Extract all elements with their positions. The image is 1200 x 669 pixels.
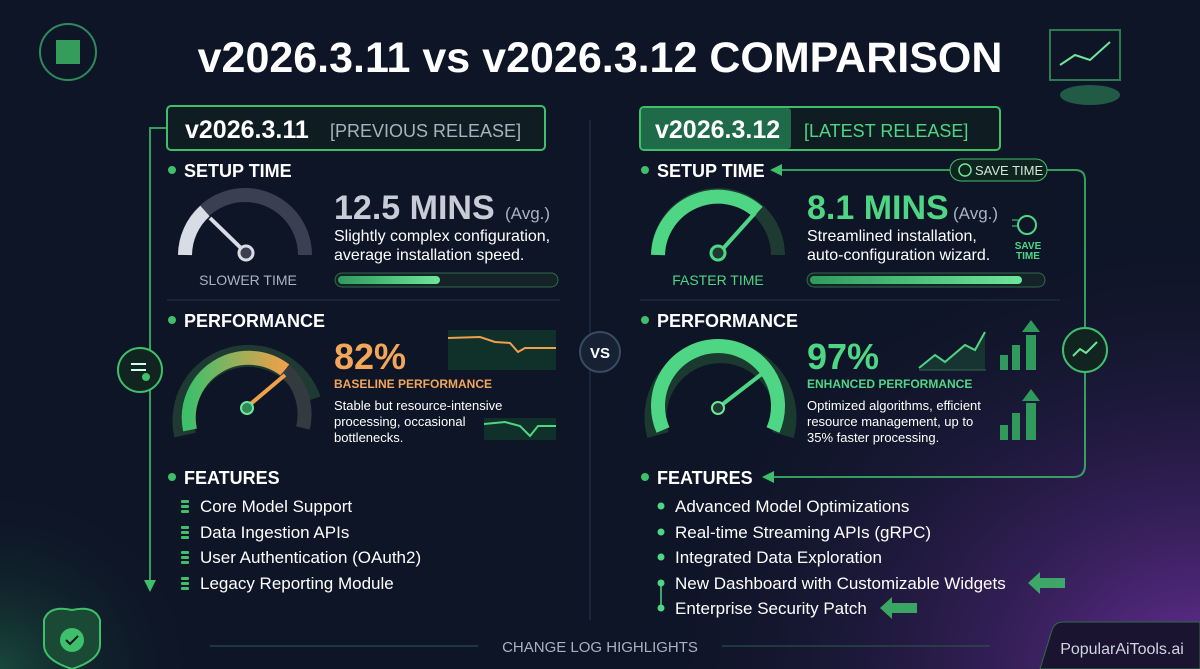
right performance: PERFORMANCE <box>657 311 798 331</box>
header: right: [LATEST RELEASE] <box>804 121 968 141</box>
right features: Real-time Streaming APIs (gRPC) <box>675 523 931 542</box>
chart: green line <box>484 418 556 440</box>
left performance: 82% <box>334 336 406 377</box>
gauge: faster <box>658 195 778 260</box>
icon: right chart node <box>1063 328 1107 372</box>
arrow: security patch <box>880 597 917 619</box>
left performance: bottlenecks. <box>334 430 403 445</box>
chart: bars bottom <box>1000 389 1040 440</box>
right setup time: SETUP TIME <box>657 161 765 181</box>
left setup time: average installation speed. <box>334 247 524 264</box>
left setup time: SLOWER TIME <box>199 272 297 288</box>
right features: FEATURES <box>657 468 753 488</box>
gauge: 97% <box>655 346 786 435</box>
header: right: v2026.3.12 <box>655 116 780 144</box>
right setup time <box>641 159 1047 288</box>
header: left <box>167 106 545 150</box>
right setup time: Streamlined installation, <box>807 228 977 245</box>
right setup time: 8.1 MINS <box>807 189 949 227</box>
header: left: [PREVIOUS RELEASE] <box>330 121 521 141</box>
icon: stopwatch save time: SAVE <box>1015 241 1042 252</box>
title: v2026.3.11 vs v2026.3.12 COMPARISON <box>198 34 1002 82</box>
icon: dashboard top-right <box>1050 30 1120 105</box>
footer: CHANGE LOG HIGHLIGHTS <box>502 639 698 656</box>
right features <box>641 468 1065 619</box>
brand: PopularAiTools.ai <box>1060 641 1184 658</box>
icon: cube top-left <box>40 24 96 80</box>
vs badge: VS <box>590 345 610 362</box>
left performance: PERFORMANCE <box>184 311 325 331</box>
right features: Enterprise Security Patch <box>675 599 867 618</box>
right setup time: (Avg.) <box>953 204 998 223</box>
chart: bars top <box>1000 320 1040 370</box>
right performance: ENHANCED PERFORMANCE <box>807 377 972 391</box>
right features: New Dashboard with Customizable Widgets <box>675 574 1006 593</box>
right performance <box>641 311 1040 445</box>
right performance: 97% <box>807 336 879 377</box>
left features: User Authentication (OAuth2) <box>200 548 421 567</box>
right performance: 35% faster processing. <box>807 430 939 445</box>
right setup time: FASTER TIME <box>672 272 764 288</box>
right performance: Optimized algorithms, efficient <box>807 398 981 413</box>
left features: FEATURES <box>184 468 280 488</box>
vs badge <box>580 332 620 372</box>
connector lines <box>150 120 1085 620</box>
left features: Legacy Reporting Module <box>200 574 394 593</box>
left features: Core Model Support <box>200 497 352 516</box>
left setup time: SETUP TIME <box>184 161 292 181</box>
save time pill <box>950 159 1047 181</box>
icon: stopwatch save time <box>1012 216 1042 262</box>
left features <box>168 468 421 593</box>
left performance: Stable but resource-intensive <box>334 398 502 413</box>
right features: Advanced Model Optimizations <box>675 497 909 516</box>
chart: orange line <box>448 330 556 370</box>
left features: Data Ingestion APIs <box>200 523 349 542</box>
header: left: v2026.3.11 <box>185 116 309 144</box>
gauge: 82% <box>183 356 310 435</box>
right performance: resource management, up to <box>807 414 973 429</box>
left performance <box>168 311 556 445</box>
save time pill: SAVE TIME <box>975 163 1043 178</box>
right features: Integrated Data Exploration <box>675 548 882 567</box>
left setup time: 12.5 MINS <box>334 189 495 227</box>
icon: left checklist node <box>118 348 162 392</box>
brand <box>1040 622 1200 669</box>
left setup time: Slightly complex configuration, <box>334 228 550 245</box>
icon: stopwatch save time: TIME <box>1016 251 1040 262</box>
icon: shield <box>44 609 100 669</box>
chart: rising line <box>919 332 986 370</box>
left performance: BASELINE PERFORMANCE <box>334 377 492 391</box>
left performance: processing, occasional <box>334 414 466 429</box>
right setup time: auto-configuration wizard. <box>807 247 990 264</box>
header: right <box>640 107 1000 150</box>
arrow: new dashboard <box>1028 572 1065 594</box>
left setup time: (Avg.) <box>505 204 550 223</box>
left setup time <box>168 161 558 288</box>
gauge: slower <box>185 195 305 260</box>
